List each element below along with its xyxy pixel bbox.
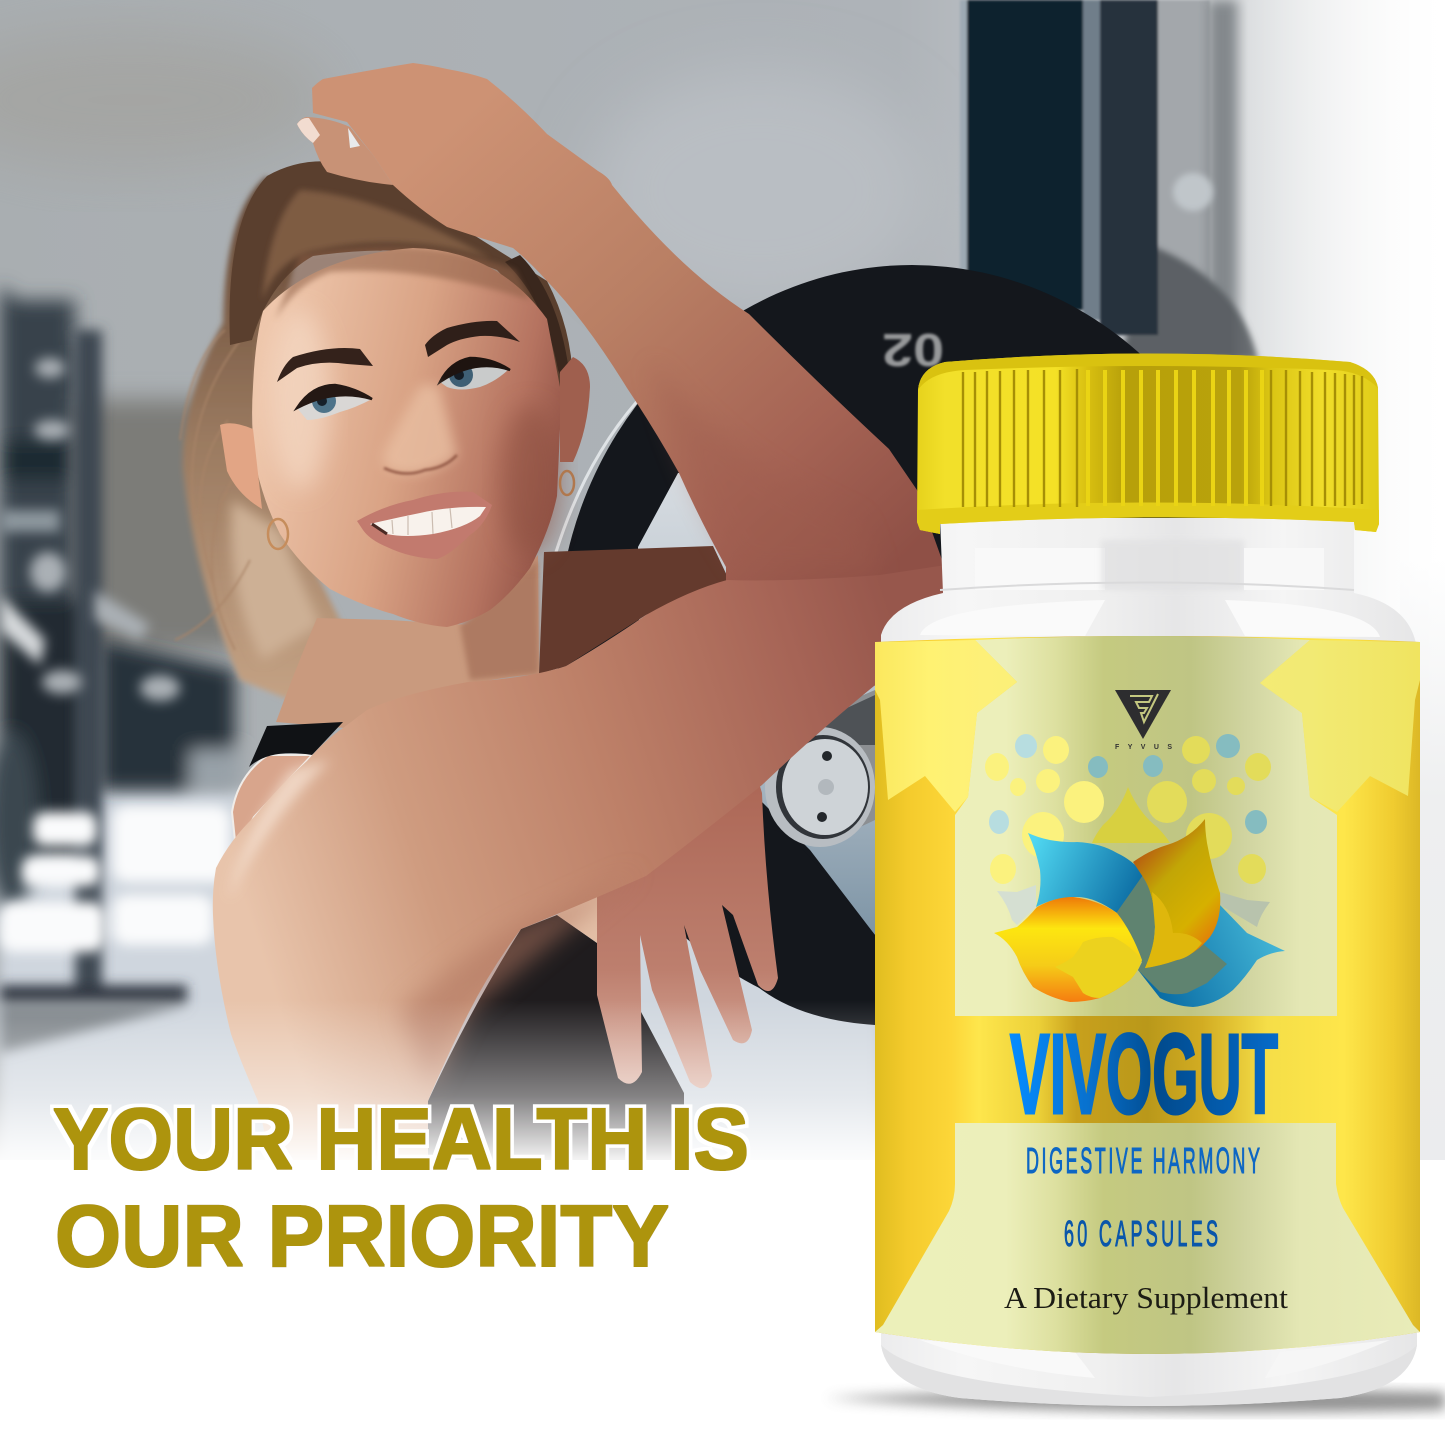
plate lower section below bar (680, 800, 875, 1025)
eyes (297, 387, 372, 420)
face (252, 248, 560, 627)
gym equipment: weight plate (556, 265, 1267, 1025)
decorative bubbles (985, 734, 1271, 927)
hair top (229, 161, 573, 410)
woman photo illustration (175, 63, 946, 1160)
brand logo: FYVUS (1115, 690, 1172, 751)
thumb and finger (297, 117, 393, 185)
hair back and ponytail (183, 176, 350, 700)
capsule count: 60 CAPSULES (1064, 1214, 1218, 1255)
supplement line: A Dietary Supplement (1004, 1280, 1288, 1315)
bottom white fade (0, 1000, 875, 1160)
product subtitle: DIGESTIVE HARMONY (1026, 1141, 1260, 1182)
gym equipment: rack on the left (0, 285, 240, 1053)
label base yellow (875, 636, 1420, 1354)
earrings (268, 519, 288, 549)
shoulder dark area (539, 546, 730, 674)
cap ribs bright (1088, 370, 1262, 506)
hand hanging (597, 780, 778, 1088)
bottle shadow (825, 1390, 1445, 1412)
gym equipment: upright post (960, 0, 1258, 360)
plate inner hole (638, 470, 875, 935)
left blue petal (1028, 833, 1150, 930)
mouth (357, 492, 492, 559)
brand logo: FYVUS: FYVUS (1115, 744, 1172, 751)
ears (220, 423, 262, 509)
cap ribs dark (963, 369, 1362, 507)
arm resting on bar (213, 565, 946, 1160)
white lower section (0, 1160, 1445, 1445)
gold petal inner (1145, 892, 1202, 968)
eyebrows (277, 348, 373, 382)
flower logo (994, 819, 1285, 1007)
neck (276, 555, 539, 728)
label lower pale panel (875, 1123, 1420, 1354)
plate outer highlight (556, 398, 640, 552)
bottle cap (917, 354, 1379, 534)
nose (383, 385, 457, 474)
headline (53, 1091, 749, 1285)
corner yellow shapes (875, 640, 1017, 812)
floor band beside bottle (1400, 560, 1445, 1160)
bottle body (881, 518, 1417, 1406)
yellow orange petal (994, 897, 1142, 1002)
right blue petal (1138, 905, 1285, 1007)
barbell end (765, 690, 875, 847)
bright floor strips (0, 806, 230, 952)
top body dark garment (428, 915, 684, 1160)
product bottle (825, 354, 1445, 1412)
headline: YOUR HEALTH IS (53, 1091, 749, 1188)
gold petal (1133, 819, 1220, 968)
label top pale field (955, 636, 1337, 1016)
back of shoulder with top piping (232, 755, 312, 850)
center teal overlap (1113, 875, 1227, 994)
plate number: 02 (882, 324, 944, 376)
top strap (249, 722, 343, 767)
headline: OUR PRIORITY (55, 1188, 669, 1285)
raised arm and hand (312, 63, 946, 590)
